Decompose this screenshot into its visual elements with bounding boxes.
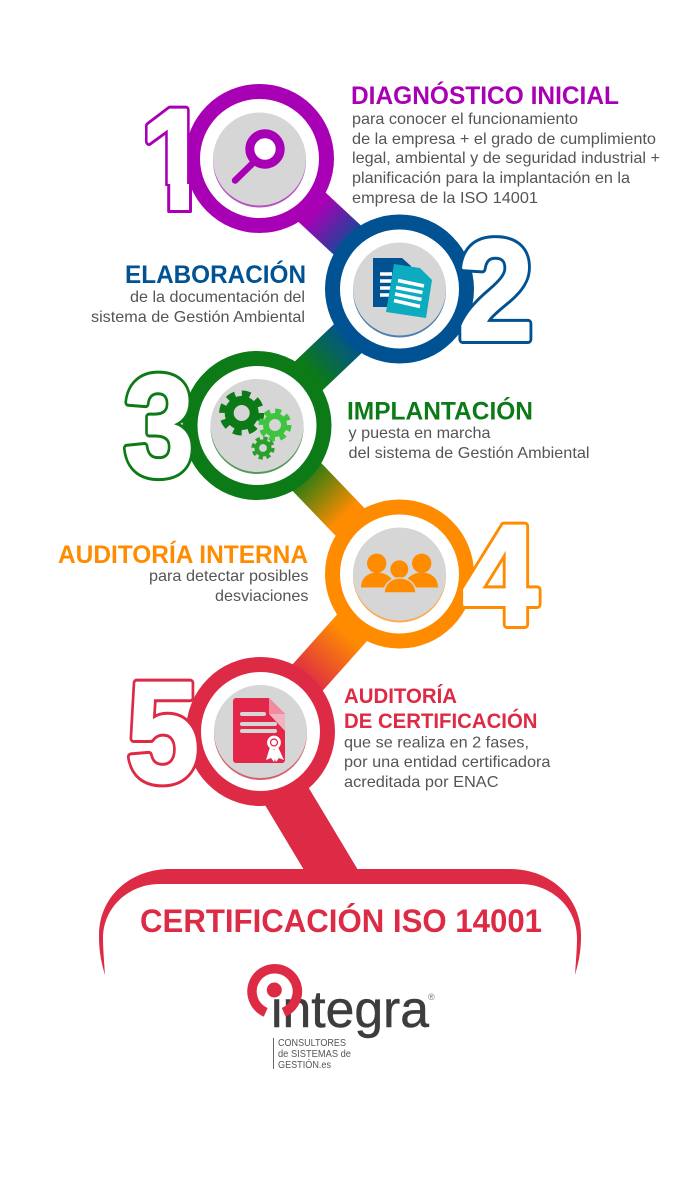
heading: result: CERTIFICACIÓN ISO 14001	[140, 903, 542, 939]
logo: Integra: CONSULTORES	[278, 1037, 346, 1049]
connector: step 5 to result banner	[262, 785, 358, 870]
text block: step 2	[91, 259, 306, 326]
text block: step 5: que se realiza en 2 fases,	[344, 734, 529, 752]
text block: step 1	[351, 80, 660, 207]
number 5: 5	[127, 654, 199, 812]
text block: step 4: AUDITORÍA INTERNA	[58, 540, 308, 569]
panel: step 4 lens	[325, 500, 474, 648]
text block: step 5: AUDITORÍA	[344, 685, 457, 708]
text block: step 3: y puesta en marcha	[348, 424, 491, 442]
text block: step 1: planificación para la implantación en la	[352, 169, 630, 187]
text block: step 3: IMPLANTACIÓN	[347, 396, 533, 426]
logo: Integra	[252, 969, 435, 1071]
number 2: 2	[458, 212, 534, 370]
text block: step 5: DE CERTIFICACIÓN	[344, 709, 538, 733]
panel: step 3 lens	[182, 351, 332, 500]
icon: magnifying glass	[235, 134, 280, 180]
text block: step 2: sistema de Gestión Ambiental	[91, 308, 305, 326]
text block: step 4: desviaciones	[215, 587, 308, 605]
number 1	[145, 106, 192, 213]
panel: step 1 lens	[185, 84, 334, 233]
icon: certificate document	[233, 698, 285, 763]
text block: step 1: legal, ambiental y de seguridad industrial +	[352, 149, 660, 167]
icon: documents	[373, 258, 432, 318]
connector: step 2 to 3	[257, 289, 400, 425]
icon: group of people	[361, 554, 438, 593]
text block: step 2: ELABORACIÓN	[125, 259, 306, 289]
text block: step 3	[347, 396, 590, 462]
text block: step 1: DIAGNÓSTICO INICIAL	[351, 80, 619, 110]
number 1: 1	[140, 80, 208, 240]
number 4: 4	[462, 496, 538, 656]
logo: Integra: GESTIÓN.es	[278, 1058, 331, 1071]
panel: step 5 lens	[186, 657, 335, 806]
text block: step 5: por una entidad certificadora	[344, 753, 551, 771]
number 2: 2	[458, 212, 534, 370]
text block: step 1: para conocer el funcionamiento	[352, 110, 578, 128]
number 4: 4	[462, 496, 538, 656]
logo: Integra: integra	[271, 981, 429, 1039]
connector: step 1 to 2	[259, 158, 400, 289]
text block: step 4: para detectar posibles	[149, 567, 308, 585]
text block: step 4	[58, 540, 308, 605]
panel: step 2 lens	[325, 214, 474, 364]
number 1: 1	[140, 80, 208, 240]
number 5: 5	[127, 654, 199, 812]
panel: result banner arc	[99, 869, 581, 975]
logo: Integra: ®	[428, 992, 435, 1002]
text block: step 3: del sistema de Gestión Ambiental	[348, 444, 590, 462]
number 3: 3	[124, 347, 194, 506]
connector: step 4 to 5	[260, 574, 400, 731]
logo: Integra: de SISTEMAS de	[278, 1048, 351, 1060]
text block: step 1: empresa de la ISO 14001	[352, 189, 538, 207]
text block: step 5: acreditada por ENAC	[344, 773, 499, 791]
text block: step 5	[344, 685, 551, 791]
connector: step 3 to 4	[257, 425, 400, 574]
number 3: 3	[124, 347, 194, 506]
icon: gears	[222, 394, 289, 458]
text block: step 1: de la empresa + el grado de cumplimiento	[352, 130, 656, 148]
text block: step 2: de la documentación del	[130, 288, 305, 306]
